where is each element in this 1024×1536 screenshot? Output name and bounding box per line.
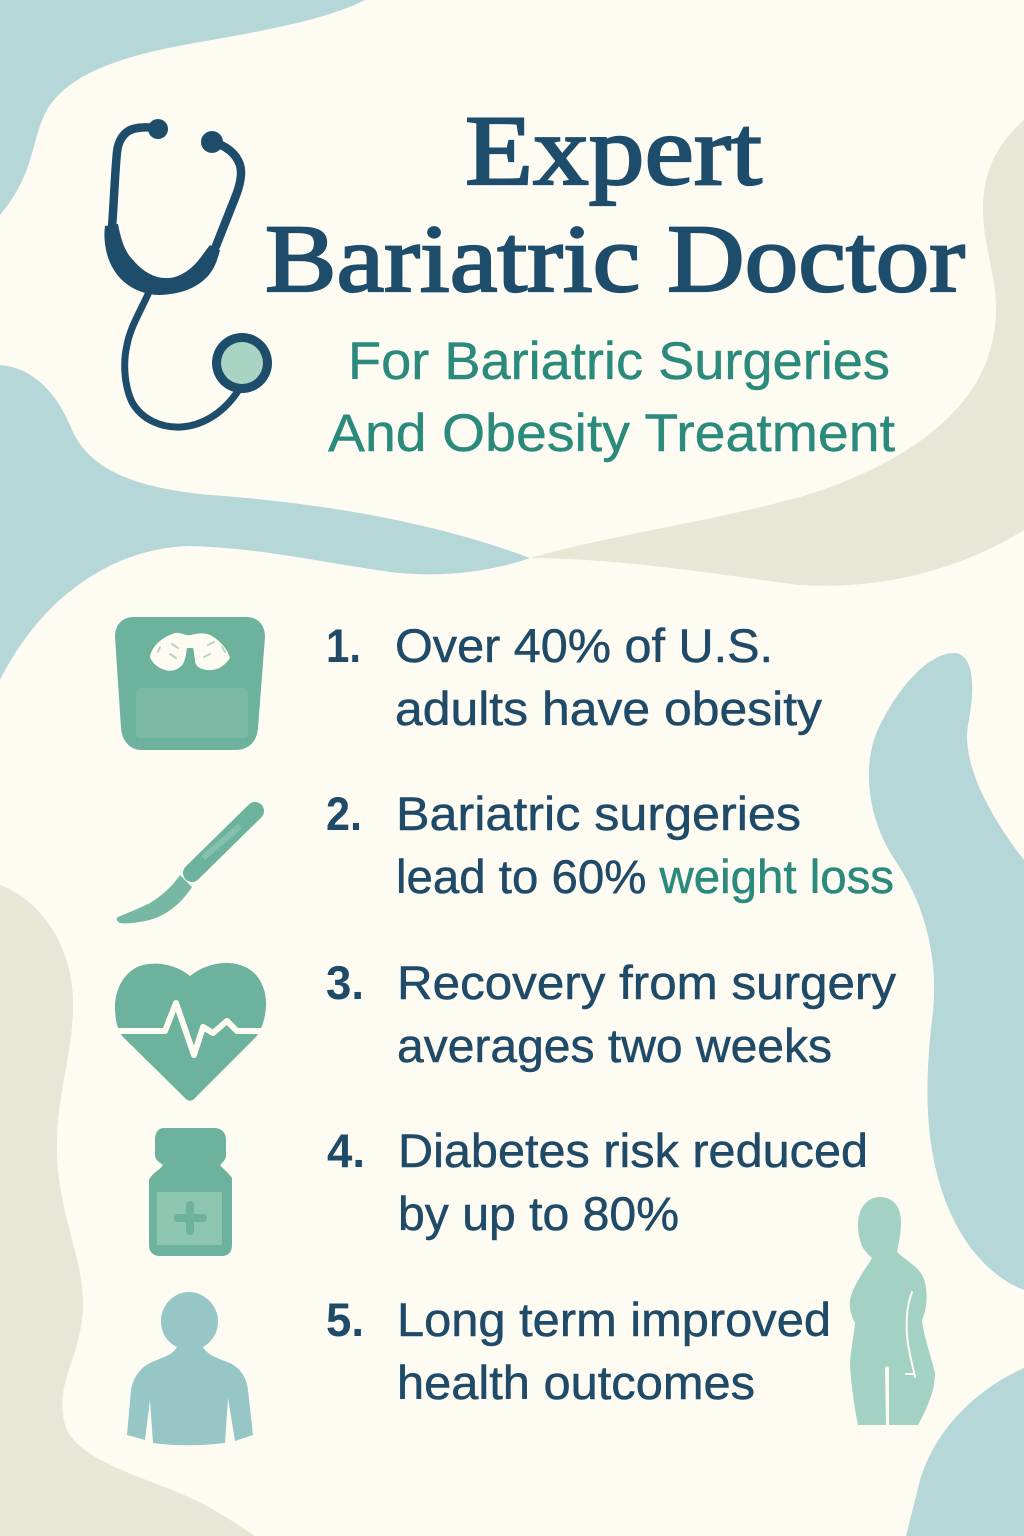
icon: stethoscope: [104, 119, 272, 427]
icon: medicine bottle: [149, 1128, 232, 1256]
text: fact 3: 3.: [326, 956, 364, 1009]
text: fact 1: Over 40% of U.S.: [395, 619, 773, 672]
icon: heart with pulse: [112, 963, 270, 1101]
text: fact 5: health outcomes: [397, 1356, 755, 1409]
text: fact 1: 1.: [326, 619, 361, 672]
subtitle: [328, 332, 895, 463]
text: fact 5: 5.: [326, 1293, 364, 1346]
title: [265, 95, 965, 312]
icon: scalpel: [117, 811, 255, 923]
text: fact 2: Bariatric surgeries: [396, 787, 801, 840]
illustration: body silhouette: [850, 1197, 935, 1425]
text: fact 2: 2.: [326, 787, 362, 840]
text: fact 3: averages two weeks: [397, 1019, 832, 1072]
subtitle: And Obesity Treatment: [328, 404, 895, 463]
text: fact 2: [326, 787, 894, 903]
icon: weighing scale: [115, 617, 265, 750]
text: fact 3: [326, 956, 897, 1072]
text: fact 4: 4.: [327, 1124, 365, 1177]
icon: person: [127, 1292, 253, 1445]
text: fact 2: lead to 60% weight loss: [396, 850, 894, 903]
text: fact 5: [326, 1293, 831, 1409]
text: fact 4: Diabetes risk reduced: [398, 1124, 868, 1177]
title: Bariatric Doctor: [265, 205, 965, 312]
text: fact 5: Long term improved: [397, 1293, 831, 1346]
text: fact 3: Recovery from surgery: [397, 956, 897, 1009]
text: fact 1: adults have obesity: [395, 682, 823, 735]
subtitle: For Bariatric Surgeries: [348, 332, 890, 391]
title: Expert: [465, 95, 762, 206]
text: fact 1: [326, 619, 823, 735]
text: fact 4: [327, 1124, 868, 1240]
text: fact 4: by up to 80%: [398, 1187, 679, 1240]
